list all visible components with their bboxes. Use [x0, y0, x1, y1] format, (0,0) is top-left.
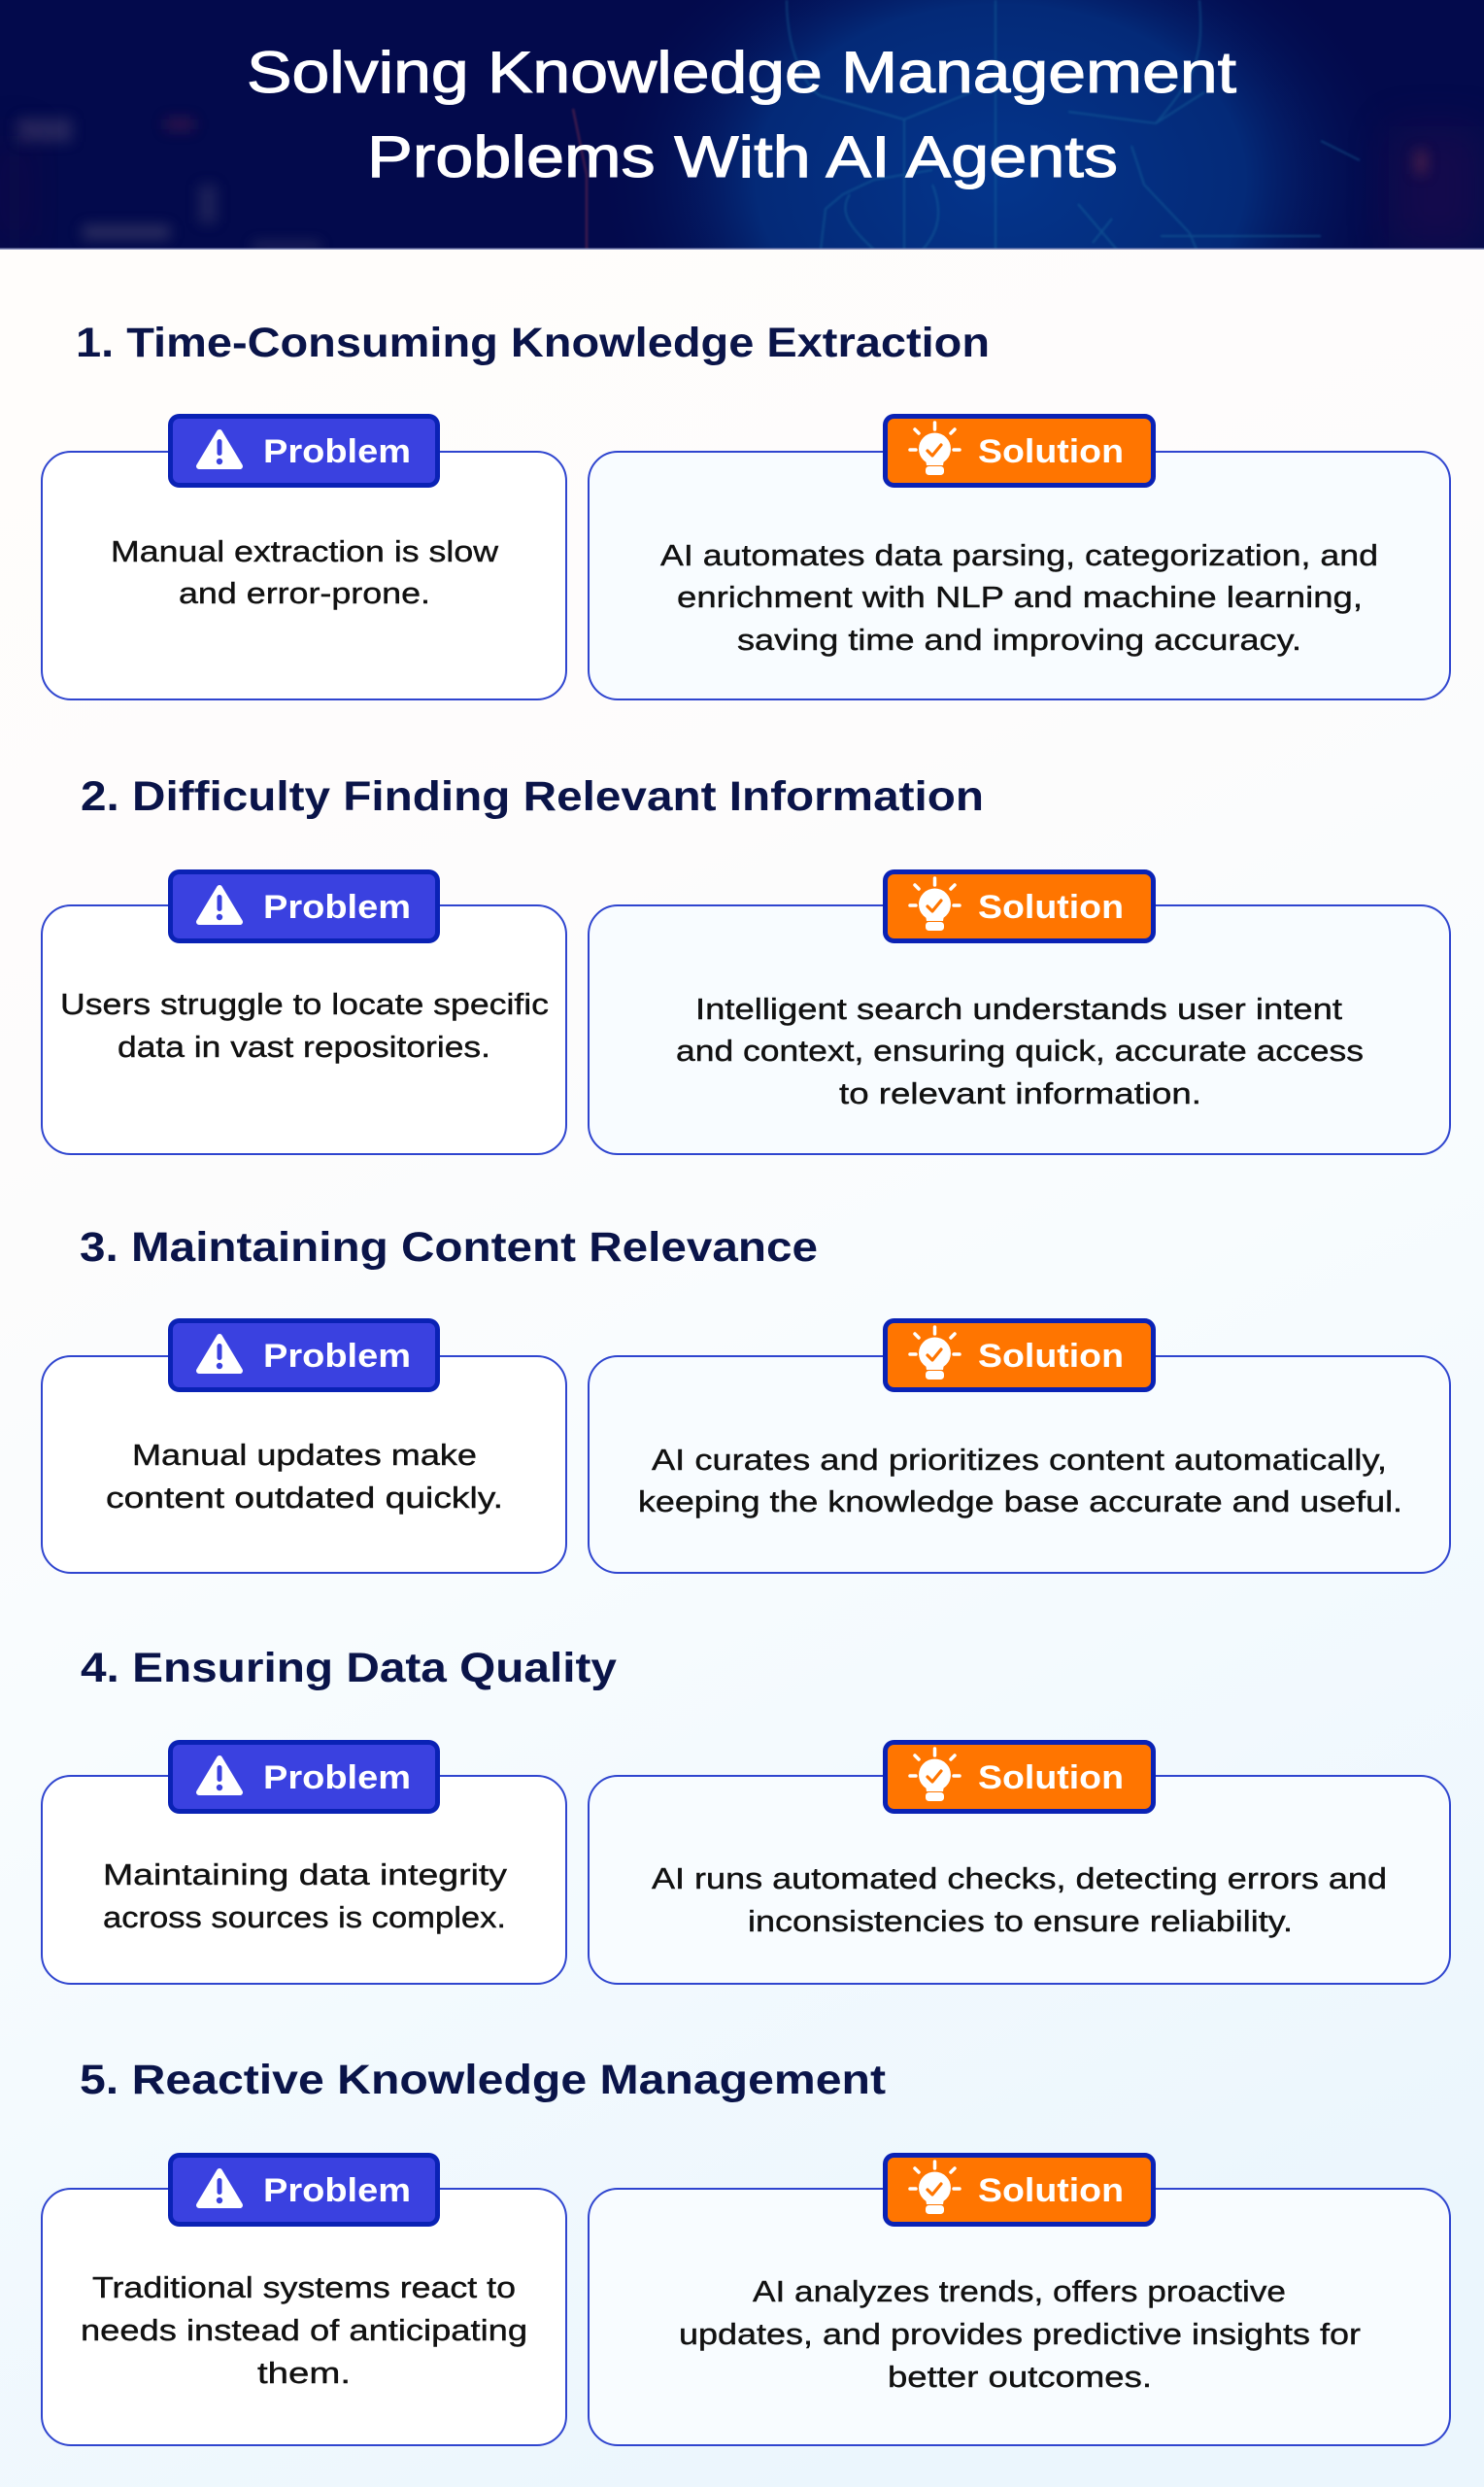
problem text: them.	[257, 2356, 351, 2390]
solution badge	[886, 2155, 1154, 2225]
section 3 heading: 3. Maintaining Content Relevance	[80, 1224, 818, 1271]
problem text: across sources is complex.	[103, 1900, 506, 1934]
problem text: Users struggle to locate specific	[60, 987, 549, 1021]
solution text	[660, 538, 1378, 657]
solution badge	[886, 872, 1154, 940]
problem text: Manual updates make	[132, 1438, 477, 1472]
problem badge	[171, 1743, 437, 1811]
solution badge	[886, 416, 1154, 486]
solution badge	[886, 1321, 1154, 1389]
problem text: content outdated quickly.	[106, 1481, 503, 1515]
solution badge: Solution	[978, 2172, 1124, 2209]
section 4 heading: 4. Ensuring Data Quality	[81, 1645, 617, 1691]
solution badge: Solution	[978, 889, 1124, 926]
problem text: data in vast repositories.	[118, 1030, 490, 1064]
solution badge: Solution	[978, 1338, 1124, 1375]
solution text: AI curates and prioritizes content automatically,	[652, 1443, 1387, 1477]
problem badge: Problem	[263, 433, 411, 470]
problem text	[60, 987, 549, 1064]
solution text	[676, 992, 1364, 1110]
panel: section 3 problem	[42, 1321, 566, 1573]
section 1 heading: 1. Time-Consuming Knowledge Extraction	[76, 320, 990, 366]
problem badge	[171, 872, 437, 940]
panel: section 4 problem	[42, 1743, 566, 1984]
solution text: to relevant information.	[839, 1076, 1201, 1110]
solution text: keeping the knowledge base accurate and useful.	[638, 1484, 1402, 1518]
solution text: saving time and improving accuracy.	[737, 623, 1301, 657]
solution text	[679, 2274, 1361, 2394]
problem text	[111, 534, 499, 610]
panel: section 3 solution	[589, 1321, 1450, 1573]
problem badge: Problem	[263, 889, 411, 926]
problem badge	[171, 2155, 437, 2225]
solution text	[652, 1861, 1387, 1938]
solution badge: Solution	[978, 433, 1124, 470]
solution text: AI automates data parsing, categorization, and	[660, 538, 1378, 572]
panel: section 5 problem	[42, 2155, 566, 2445]
problem badge	[171, 416, 437, 486]
problem text: Traditional systems react to	[92, 2270, 516, 2304]
solution badge	[886, 1743, 1154, 1811]
problem badge: Problem	[263, 1759, 411, 1796]
problem badge: Problem	[263, 2172, 411, 2209]
header banner	[0, 0, 1484, 250]
problem badge: Problem	[263, 1338, 411, 1375]
solution text: AI analyzes trends, offers proactive	[753, 2274, 1286, 2308]
panel: section 2 solution	[589, 872, 1450, 1154]
solution badge: Solution	[978, 1759, 1124, 1796]
solution text: inconsistencies to ensure reliability.	[748, 1904, 1293, 1938]
panel: section 1 solution	[589, 416, 1450, 699]
section 2 heading: 2. Difficulty Finding Relevant Information	[81, 773, 984, 820]
problem text	[106, 1438, 503, 1515]
solution text: AI runs automated checks, detecting errors and	[652, 1861, 1387, 1895]
solution text	[638, 1443, 1402, 1518]
solution text: better outcomes.	[888, 2360, 1152, 2394]
solution text: Intelligent search understands user intent	[695, 992, 1342, 1026]
solution text: updates, and provides predictive insights for	[679, 2317, 1361, 2351]
solution text: enrichment with NLP and machine learning,	[677, 580, 1363, 614]
problem text: Maintaining data integrity	[103, 1857, 508, 1891]
problem text	[81, 2270, 527, 2390]
panel: section 4 solution	[589, 1743, 1450, 1984]
panel: section 2 problem	[42, 872, 566, 1154]
title: Problems With AI Agents	[367, 124, 1118, 189]
solution text: and context, ensuring quick, accurate access	[676, 1034, 1364, 1068]
title: Solving Knowledge Management	[247, 40, 1236, 105]
section 5 heading: 5. Reactive Knowledge Management	[80, 2057, 886, 2103]
problem badge	[171, 1321, 437, 1389]
panel: section 5 solution	[589, 2155, 1450, 2445]
panel: section 1 problem	[42, 416, 566, 699]
problem text: and error-prone.	[179, 576, 430, 610]
problem text	[103, 1857, 508, 1934]
title	[247, 40, 1236, 189]
problem text: Manual extraction is slow	[111, 534, 499, 568]
problem text: needs instead of anticipating	[81, 2313, 527, 2347]
